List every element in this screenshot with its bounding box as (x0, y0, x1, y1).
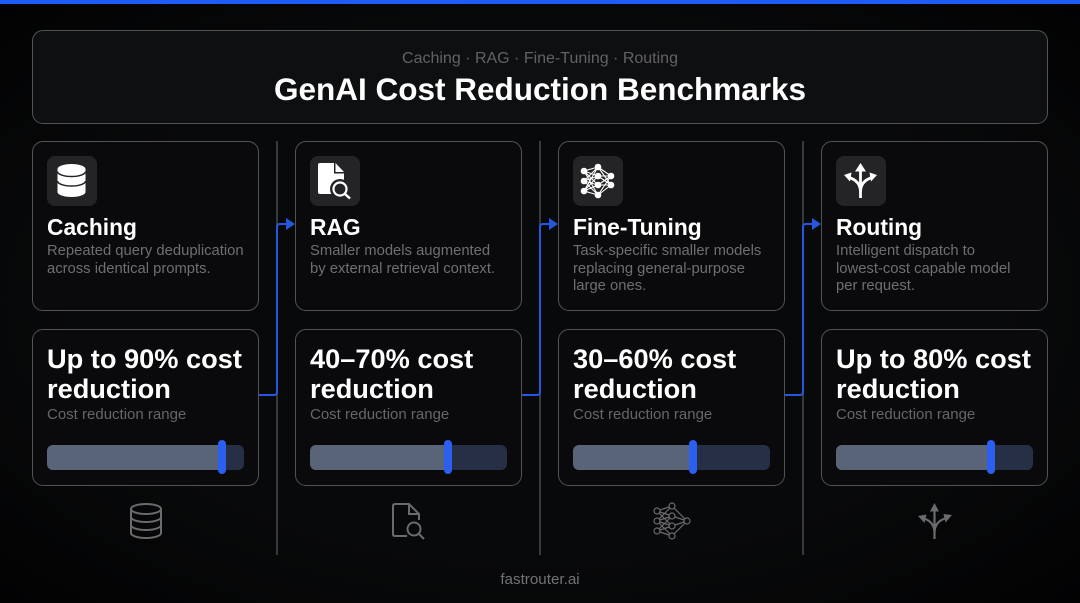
text: fine-tuning description: replacing general-purpose (573, 261, 745, 277)
panel: RAG metric (295, 329, 522, 486)
arrow: fine-tuning to routing (785, 218, 821, 396)
metric: caching reduction: Up to 90% cost (47, 343, 242, 374)
metric: routing reduction (836, 343, 1031, 404)
panel: caching description (32, 141, 259, 311)
metric: routing reduction: reduction (836, 373, 960, 404)
metric: caching reduction (47, 343, 242, 404)
text: fine-tuning description: large ones. (573, 278, 646, 294)
text: routing description: per request. (836, 278, 915, 294)
panel: caching metric (32, 329, 259, 486)
text: RAG description (310, 243, 495, 277)
arrow: caching to RAG (259, 218, 295, 396)
column divider 1 (276, 141, 278, 555)
icon: document search outline (392, 503, 425, 540)
text: routing description (836, 243, 1010, 294)
text: RAG description: by external retrieval context. (310, 261, 495, 277)
icon: neural network outline (653, 502, 691, 540)
bar: routing 80 percent (836, 445, 1033, 470)
label: RAG range: Cost reduction range (310, 406, 449, 423)
text: fine-tuning description (573, 243, 761, 294)
text: RAG description: Smaller models augmented (310, 243, 490, 259)
header panel (32, 30, 1048, 124)
arrow: RAG to fine-tuning (522, 218, 558, 396)
icon: branching arrows (836, 156, 886, 206)
label: routing range: Cost reduction range (836, 406, 975, 423)
top accent bar (0, 0, 1080, 4)
panel: RAG description (295, 141, 522, 311)
panel: fine-tuning metric (558, 329, 785, 486)
heading: routing: Routing (836, 214, 922, 240)
panel: fine-tuning description (558, 141, 785, 311)
icon: branching arrows outline (918, 503, 952, 539)
metric: routing reduction: Up to 80% cost (836, 343, 1031, 374)
text: routing description: Intelligent dispatch to (836, 243, 975, 259)
panel: routing description (821, 141, 1048, 311)
text: caching description (47, 243, 244, 277)
icon: database outline (130, 503, 162, 539)
footer brand: fastrouter.ai (500, 571, 580, 588)
bar: caching 90 percent (47, 445, 244, 470)
column divider 3 (802, 141, 804, 555)
text: caching description: Repeated query deduplication (47, 243, 244, 259)
label: fine-tuning range: Cost reduction range (573, 406, 712, 423)
icon: neural network (573, 156, 623, 206)
metric: fine-tuning reduction: 30–60% cost (573, 343, 736, 374)
metric: fine-tuning reduction: reduction (573, 373, 697, 404)
metric: fine-tuning reduction (573, 343, 736, 404)
text: fine-tuning description: Task-specific smaller models (573, 243, 761, 259)
heading: fine-tuning: Fine-Tuning (573, 214, 702, 240)
metric: RAG reduction (310, 343, 473, 404)
metric: caching reduction: reduction (47, 373, 171, 404)
metric: RAG reduction: 40–70% cost (310, 343, 473, 374)
title: GenAI Cost Reduction Benchmarks (274, 71, 806, 107)
text: routing description: lowest-cost capable model (836, 261, 1010, 277)
heading: RAG: RAG (310, 214, 361, 240)
text: caching description: across identical prompts. (47, 261, 211, 277)
icon: database (47, 156, 97, 206)
bar: fine-tuning 60 percent (573, 445, 770, 470)
column divider 2 (539, 141, 541, 555)
heading: caching: Caching (47, 214, 137, 240)
panel: routing metric (821, 329, 1048, 486)
metric: RAG reduction: reduction (310, 373, 434, 404)
label: caching range: Cost reduction range (47, 406, 186, 423)
bar: RAG 70 percent (310, 445, 507, 470)
header subtitle: Caching · RAG · Fine-Tuning · Routing (402, 50, 678, 67)
icon: document search (310, 156, 360, 206)
